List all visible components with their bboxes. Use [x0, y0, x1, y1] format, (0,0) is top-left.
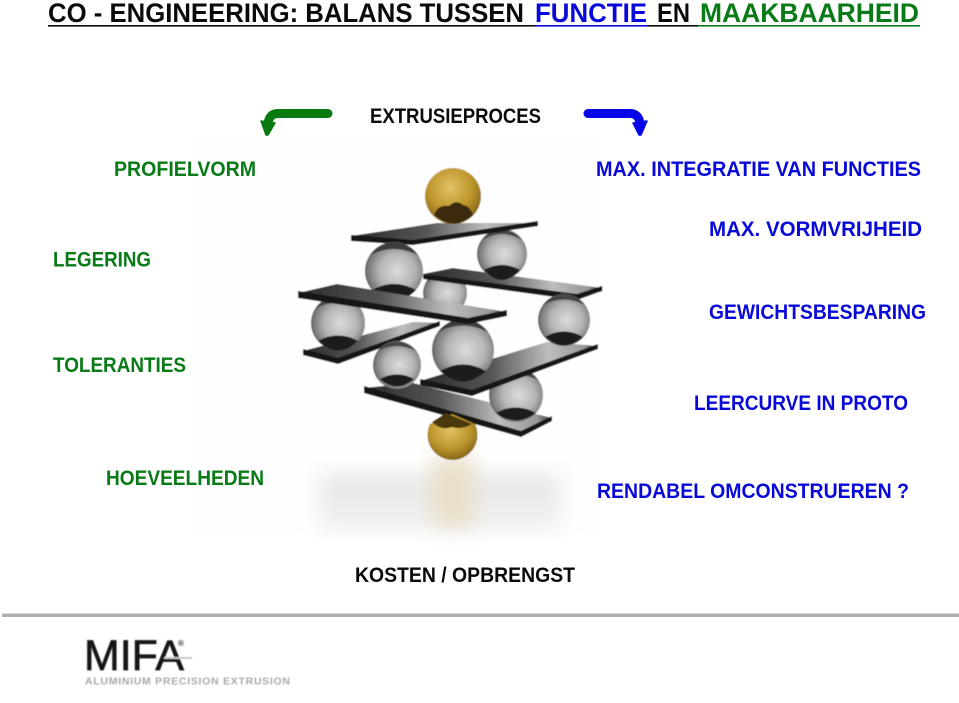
label: kosten opbrengst: KOSTEN / OPBRENGST — [355, 563, 575, 587]
sphere centre — [432, 319, 494, 382]
plank lower right — [420, 342, 598, 396]
logo: MIFA: MIFA — [84, 632, 184, 680]
sphere right — [538, 294, 590, 346]
label: leercurve: LEERCURVE IN PROTO — [694, 391, 908, 415]
label: hoeveelheden: HOEVEELHEDEN — [106, 466, 264, 490]
plank lower left — [303, 321, 440, 364]
title — [48, 0, 920, 28]
plank top — [351, 221, 538, 245]
label: legering: LEGERING — [53, 248, 151, 272]
sphere small centre — [373, 341, 421, 389]
illustration: balancing spheres — [190, 140, 602, 532]
label: max vormvrijheid: MAX. VORMVRIJHEID — [709, 217, 922, 241]
plank bottom — [364, 383, 552, 437]
logo: MIFA: ® — [178, 639, 184, 648]
sphere upper left — [365, 242, 423, 301]
back sphere — [423, 271, 467, 315]
gold sphere top — [425, 168, 481, 224]
label: toleranties: TOLERANTIES — [53, 353, 186, 377]
label: profielvorm: PROFIELVORM — [114, 157, 256, 181]
heading: extrusieproces: EXTRUSIEPROCES — [370, 104, 541, 128]
gold sphere bottom — [428, 413, 477, 460]
plank upper right — [423, 268, 602, 300]
sphere far left — [311, 296, 365, 350]
arrow: green left — [261, 114, 328, 135]
arrow: blue right — [588, 114, 647, 135]
logo: MIFA: ALUMINIUM PRECISION EXTRUSION — [85, 676, 290, 688]
logo: MIFA — [84, 632, 290, 688]
plank middle big — [298, 284, 507, 324]
footer divider — [2, 614, 959, 617]
label: rendabel: RENDABEL OMCONSTRUEREN ? — [597, 479, 909, 503]
label: max integratie: MAX. INTEGRATIE VAN FUNCTIES — [596, 157, 921, 181]
label: gewichtsbesparing: GEWICHTSBESPARING — [709, 300, 926, 324]
sphere lower right — [489, 368, 543, 422]
sphere right upper — [477, 229, 527, 280]
